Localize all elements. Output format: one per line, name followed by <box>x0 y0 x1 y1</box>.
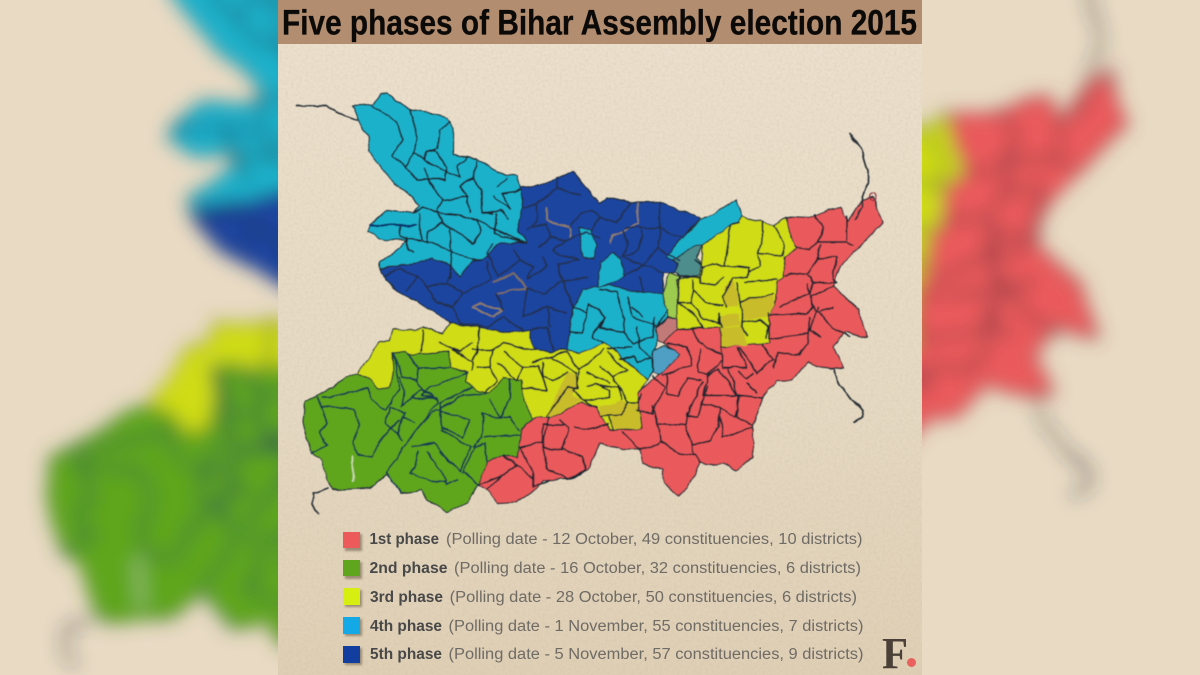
legend row: 2nd phase <box>343 560 861 579</box>
legend <box>343 531 864 665</box>
legend row: 4th phase: (Polling date - 1 November, 55 constituencies, 7 districts) <box>448 618 864 635</box>
paper panel <box>278 0 922 675</box>
title: Five phases of Bihar Assembly election 2015 <box>282 4 917 42</box>
title band <box>278 0 922 44</box>
legend row: 2nd phase: (Polling date - 16 October, 32 constituencies, 6 districts) <box>454 560 861 577</box>
legend row: 1st phase: (Polling date - 12 October, 49 constituencies, 10 districts) <box>446 531 862 548</box>
legend row: 4th phase <box>343 617 864 636</box>
legend row: 2nd phase: 2nd phase <box>370 560 448 577</box>
legend row: 1st phase <box>343 531 862 551</box>
legend row: 1st phase: 1st phase <box>370 531 439 548</box>
legend row: 5th phase: (Polling date - 5 November, 57 constituencies, 9 districts) <box>448 646 864 663</box>
legend row: 5th phase <box>343 646 864 665</box>
legend row: 3rd phase <box>343 588 857 607</box>
legend row: 3rd phase: (Polling date - 28 October, 50 constituencies, 6 districts) <box>450 589 857 606</box>
legend row: 5th phase: 5th phase <box>370 646 442 663</box>
legend row: 4th phase: 4th phase <box>370 618 442 635</box>
legend row: 3rd phase: 3rd phase <box>370 589 443 606</box>
map of Bihar <box>297 93 883 513</box>
